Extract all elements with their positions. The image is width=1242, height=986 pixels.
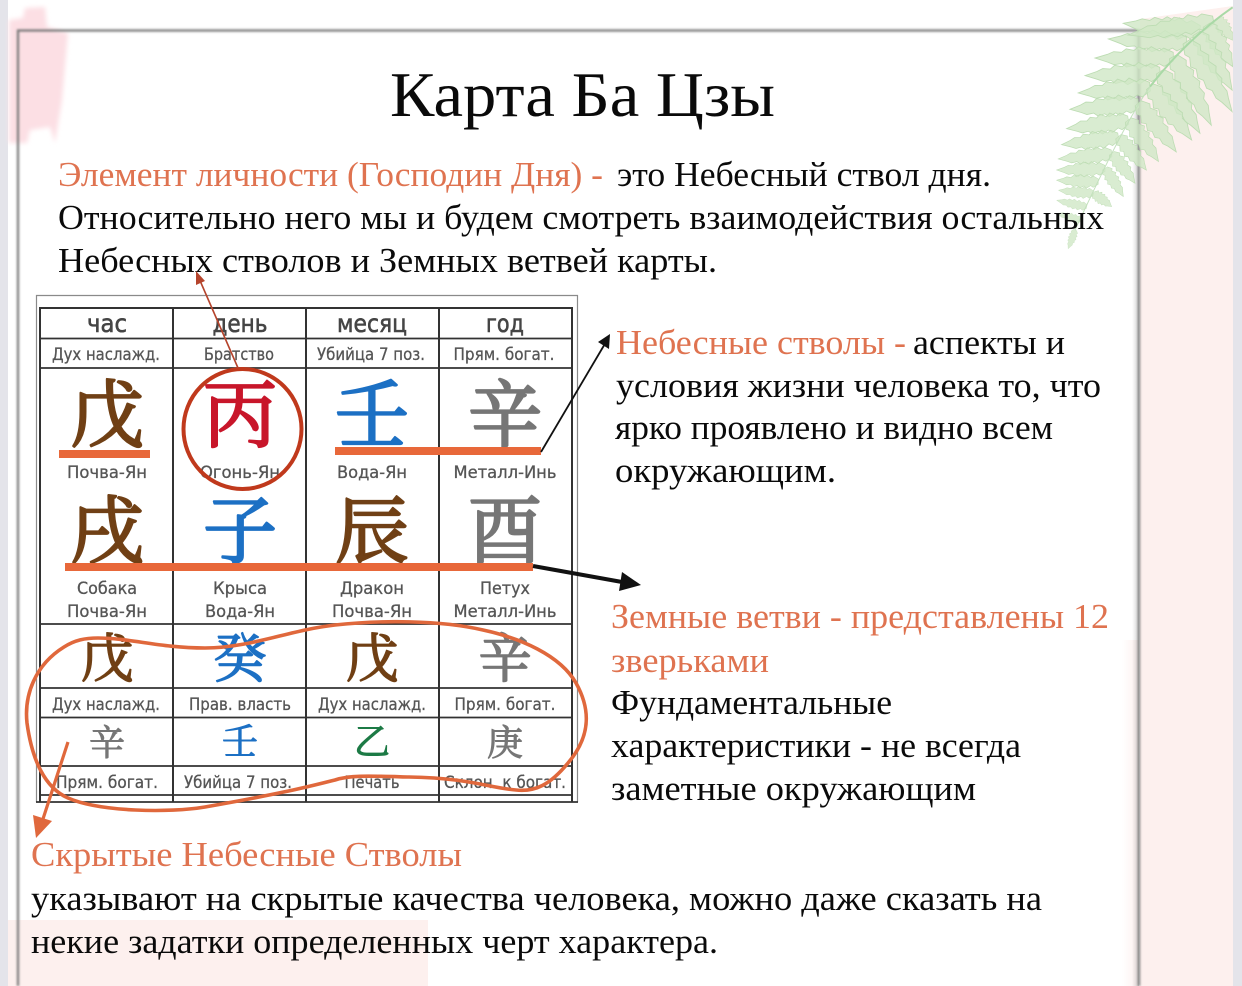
- title: Карта Ба Цзы: [390, 59, 775, 130]
- text block: heavenly stems: ярко проявлено и видно всем: [615, 408, 1053, 447]
- column headers: день: [212, 309, 268, 338]
- text block: heavenly stems: [615, 323, 1101, 490]
- text block: earthly branches: заметные окружающим: [611, 769, 976, 808]
- row: earthly branches glyphs: 辰: [335, 473, 409, 579]
- row: hidden stems secondary: 乙: [354, 714, 390, 765]
- text block: earthly branches: зверьками: [611, 641, 769, 680]
- arrow: stems to description: [541, 334, 610, 452]
- arrow: hidden stems to description: [33, 742, 68, 838]
- decoration: pink brush stroke: [9, 7, 68, 143]
- arrow: day master to definition: [196, 271, 238, 368]
- text block: hidden heavenly stems: указывают на скрытые качества человека, можно даже сказать на: [31, 879, 1042, 918]
- row: hidden stems secondary relations: Склон. к богат.: [444, 773, 566, 793]
- text block: heavenly stems: окружающим.: [615, 451, 836, 490]
- row: heavenly stems glyphs: 丙: [203, 357, 277, 463]
- column headers: [87, 309, 524, 338]
- row: hidden stems secondary relations: Печать: [344, 773, 400, 793]
- row: hidden stems primary: [80, 617, 532, 693]
- row: branch animals and elements: Почва-Ян: [332, 602, 412, 622]
- row: branch animals and elements: Крыса: [213, 579, 267, 599]
- text block: heavenly stems: Небесные стволы -: [616, 323, 906, 362]
- row: branch animals and elements: Петух: [480, 579, 530, 599]
- row: branch animals and elements: Собака: [77, 579, 137, 599]
- highlight: underline hour stem: [59, 450, 150, 458]
- text block: earthly branches: [611, 597, 1109, 808]
- row: branch animals and elements: Металл-Инь: [454, 602, 556, 622]
- row: branch animals and elements: Вода-Ян: [205, 602, 275, 622]
- row: hidden stems primary: 辛: [478, 617, 532, 693]
- highlight: circle around day master: [184, 369, 302, 489]
- row: heavenly stem relations: Братство: [204, 345, 274, 365]
- text block: day master definition: Небесных стволов и Земных ветвей карты.: [58, 241, 717, 280]
- highlight: underline month and year stems: [335, 447, 541, 455]
- row: hidden stems primary relations: Прав. власть: [189, 695, 291, 715]
- text block: heavenly stems: аспекты и: [913, 323, 1065, 362]
- text block: earthly branches: характеристики - не всегда: [611, 726, 1021, 765]
- row: earthly branches glyphs: 子: [203, 473, 277, 579]
- row: hidden stems primary: 癸: [214, 617, 266, 693]
- text block: hidden heavenly stems: Скрытые Небесные Стволы: [31, 835, 462, 874]
- row: hidden stems primary: 戊: [80, 617, 134, 693]
- row: hidden stems secondary: 庚: [487, 715, 523, 766]
- text block: day master definition: Относительно него мы и будем смотреть взаимодействия остальных: [58, 198, 1105, 237]
- highlight: outline around hidden stems: [27, 622, 586, 810]
- row: hidden stems secondary relations: Прям. богат.: [56, 773, 158, 793]
- row: heavenly stem relations: Убийца 7 поз.: [317, 345, 425, 365]
- row: heavenly stems glyphs: [70, 357, 542, 463]
- Ba Zi chart table: [36, 296, 578, 802]
- decoration: fern leaf: [1055, 7, 1242, 250]
- text block: earthly branches: Фундаментальные: [611, 683, 892, 722]
- row: hidden stems secondary relations: Убийца 7 поз.: [184, 773, 292, 793]
- text block: day master definition: [58, 155, 1105, 280]
- row: hidden stems primary relations: [52, 695, 556, 715]
- row: heavenly stem relations: [52, 345, 554, 365]
- row: heavenly stems glyphs: 辛: [468, 357, 542, 463]
- row: stem elements: Огонь-Ян: [200, 463, 280, 483]
- text block: earthly branches: Земные ветви - представлены 12: [611, 597, 1109, 636]
- row: branch animals and elements: [67, 579, 556, 622]
- row: heavenly stems glyphs: 壬: [335, 357, 409, 463]
- arrow: branches to description: [533, 566, 641, 591]
- row: stem elements: Вода-Ян: [337, 463, 407, 483]
- row: hidden stems primary relations: Дух наслажд.: [318, 695, 426, 715]
- text block: heavenly stems: условия жизни человека то, что: [616, 366, 1101, 405]
- row: earthly branches glyphs: 酉: [468, 473, 542, 579]
- column headers: год: [486, 309, 524, 338]
- text block: hidden heavenly stems: некие задатки определенных черт характера.: [31, 922, 718, 961]
- text block: day master definition: это Небесный ствол дня.: [617, 155, 991, 194]
- row: heavenly stems glyphs: 戊: [70, 357, 144, 463]
- row: stem elements: [67, 463, 556, 483]
- column headers: месяц: [337, 309, 407, 338]
- highlight: underline earthly branches: [65, 563, 533, 571]
- row: heavenly stem relations: Прям. богат.: [454, 345, 554, 365]
- row: earthly branches glyphs: 戌: [70, 473, 144, 579]
- row: hidden stems secondary: [89, 714, 523, 766]
- row: branch animals and elements: Почва-Ян: [67, 602, 147, 622]
- row: stem elements: Почва-Ян: [67, 463, 147, 483]
- row: hidden stems secondary: 壬: [222, 714, 258, 765]
- row: stem elements: Металл-Инь: [454, 463, 556, 483]
- row: hidden stems secondary: 辛: [89, 715, 125, 766]
- row: hidden stems primary relations: Прям. богат.: [454, 695, 556, 715]
- row: earthly branches glyphs: [70, 473, 542, 579]
- row: hidden stems primary relations: Дух наслажд.: [52, 695, 160, 715]
- row: hidden stems secondary relations: [56, 773, 566, 793]
- row: hidden stems primary: 戊: [346, 617, 398, 693]
- text block: day master definition: Элемент личности (Господин Дня) -: [58, 155, 603, 194]
- column headers: час: [87, 309, 127, 338]
- text block: hidden heavenly stems: [31, 835, 1042, 961]
- row: branch animals and elements: Дракон: [340, 579, 404, 599]
- row: heavenly stem relations: Дух наслажд.: [52, 345, 160, 365]
